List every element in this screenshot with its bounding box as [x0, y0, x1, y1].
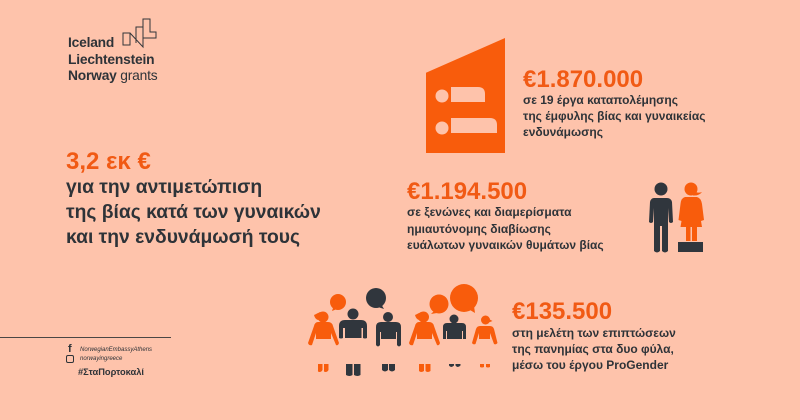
- heading: subtitle: της βίας κατά των γυναικών: [66, 202, 321, 223]
- person 6: [472, 316, 498, 368]
- person 2: [339, 288, 386, 376]
- icon: building: [426, 38, 505, 153]
- stat: 135.500: της πανημίας στα δυο φύλα,: [512, 342, 674, 356]
- stat: 1.194.500: [407, 178, 604, 252]
- stat: 1.870.000: €1.870.000: [523, 66, 643, 93]
- hashtag: #ΣταΠορτοκαλί: [78, 367, 144, 377]
- stat: 1.870.000: ενδυνάμωσης: [523, 125, 603, 139]
- heading: subtitle: [66, 177, 321, 248]
- stat: 1.194.500: €1.194.500: [407, 178, 527, 205]
- logo mark: [123, 19, 156, 47]
- logo text: [68, 35, 158, 83]
- stat: 1.194.500: ευάλωτων γυναικών θυμάτων βίας: [407, 238, 604, 252]
- icon: speaking group: [308, 284, 498, 376]
- stat: 135.500: [512, 298, 676, 372]
- heading: subtitle: για την αντιμετώπιση: [66, 177, 262, 198]
- heading: total amount: 3,2 εκ €: [66, 148, 151, 175]
- stat: 1.194.500: σε ξενώνες και διαμερίσματα: [407, 205, 571, 219]
- stat: 135.500: στη μελέτη των επιπτώσεων: [512, 326, 676, 340]
- icon: man and woman: [649, 182, 704, 252]
- icon: instagram: [66, 355, 74, 362]
- facebook handle: NorwegianEmbassyAthens: [80, 347, 152, 353]
- social links: [66, 343, 152, 363]
- woman: [678, 182, 704, 241]
- logo text: Norway grants: [68, 68, 157, 83]
- stat: 1.870.000: σε 19 έργα καταπολέμησης: [523, 93, 678, 107]
- stat: 1.194.500: ημιαυτόνομης διαβίωσης: [407, 222, 551, 236]
- stat: 135.500: €135.500: [512, 298, 612, 325]
- person 1: [308, 294, 346, 372]
- icon: facebook: f: [68, 343, 72, 355]
- stat: 1.870.000: [523, 66, 706, 139]
- divider line: [0, 336, 171, 338]
- instagram handle: norwayingreece: [80, 356, 122, 362]
- logo text: Liechtenstein: [68, 52, 154, 66]
- logo text: Iceland: [68, 35, 114, 50]
- man: [649, 182, 673, 252]
- stat: 1.870.000: της έμφυλης βίας και γυναικείας: [523, 109, 706, 123]
- stat: 135.500: μέσω του έργου ProGender: [512, 358, 668, 372]
- person 3: [376, 312, 401, 372]
- platform: [678, 242, 703, 252]
- person 5: [443, 314, 466, 367]
- heading: subtitle: και την ενδυνάμωσή τους: [66, 227, 300, 248]
- person 4: [409, 284, 478, 372]
